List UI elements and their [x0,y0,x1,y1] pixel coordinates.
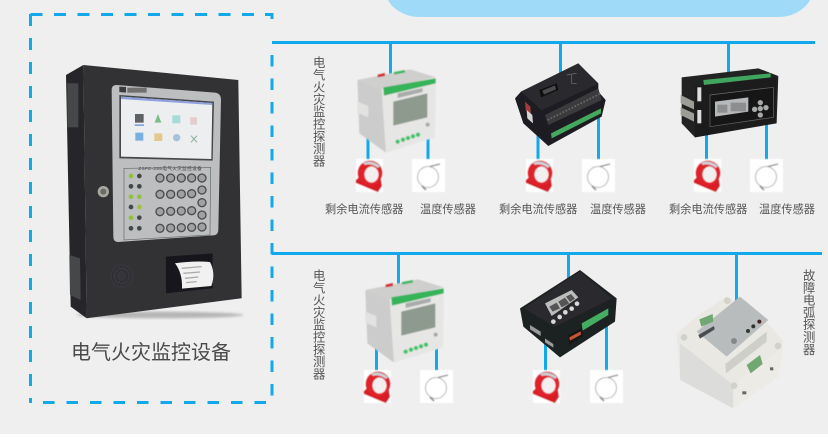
vertical label: arc fault detector: 测 [803,330,815,344]
sensor labels [325,202,815,216]
vertical label: lower detector: 电 [313,269,325,283]
vertical label: upper detector: 气 [313,67,325,82]
sensors, lower row [364,370,623,403]
sensor labels: 剩余电流传感器 [669,202,747,216]
vertical label: upper detector: 器 [313,154,325,168]
vertical label: upper detector: 控 [313,118,325,132]
vertical label: upper detector: 火 [313,81,325,95]
speaker [110,264,134,288]
vertical label: arc fault detector: 探 [803,318,815,332]
detector: white panel, lower [365,279,444,363]
vertical label: arc fault detector: 电 [803,294,815,308]
dashed frame around monitoring equipment [30,14,272,403]
vertical label: arc fault detector: 器 [803,343,815,357]
sensors, upper row [356,159,783,192]
detector: arc fault unit [677,297,783,408]
sensor labels: 剩余电流传感器 [499,202,577,216]
vertical label: upper detector: 监 [313,105,325,119]
upper bus line [272,41,815,44]
keypad buttons [156,174,206,232]
monitoring cabinet [66,65,243,318]
control panel [112,85,221,242]
sensor labels: 剩余电流传感器 [325,202,403,216]
indicator lights [129,174,142,231]
vertical label: arc fault detector: 弧 [803,306,815,320]
sensor labels: 温度传感器 [590,202,646,216]
vertical label: lower detector: 灾 [313,305,325,320]
sensor labels: 温度传感器 [759,202,815,216]
detector: black din rail unit [515,63,606,146]
detector: black panel unit [681,68,778,137]
detector: black din unit with display [520,270,617,357]
vertical label: upper detector: 电 [313,56,325,70]
vertical label: upper detector: 探 [313,130,325,144]
keypad model text: ZSFE-255电气火灾监控设备 [138,165,202,172]
vertical label: lower detector: 气 [313,280,325,295]
top light blue banner [385,0,813,17]
vertical label: lower detector: 控 [313,330,325,344]
vertical label: upper detector: 测 [313,142,325,156]
label: monitoring equipment: 电气火灾监控设备 [71,341,231,364]
printer [166,253,213,293]
vertical label: lower detector: 探 [313,343,325,357]
sensor labels: 温度传感器 [420,202,476,216]
vertical label: lower detector: 监 [313,318,325,332]
vertical label: arc fault detector: 故 [803,268,815,283]
vertical label: lower detector: 火 [313,294,325,308]
vertical label: upper detector: 灾 [313,92,325,107]
vertical label: arc fault detector: 障 [803,280,815,295]
bottom white strip [0,434,828,438]
lock [98,186,109,197]
lower bus line [272,252,822,255]
vertical label: lower detector: 器 [313,367,325,381]
detector: white panel, upper [357,69,436,153]
connection wires [366,42,768,371]
vertical label: lower detector: 测 [313,355,325,369]
